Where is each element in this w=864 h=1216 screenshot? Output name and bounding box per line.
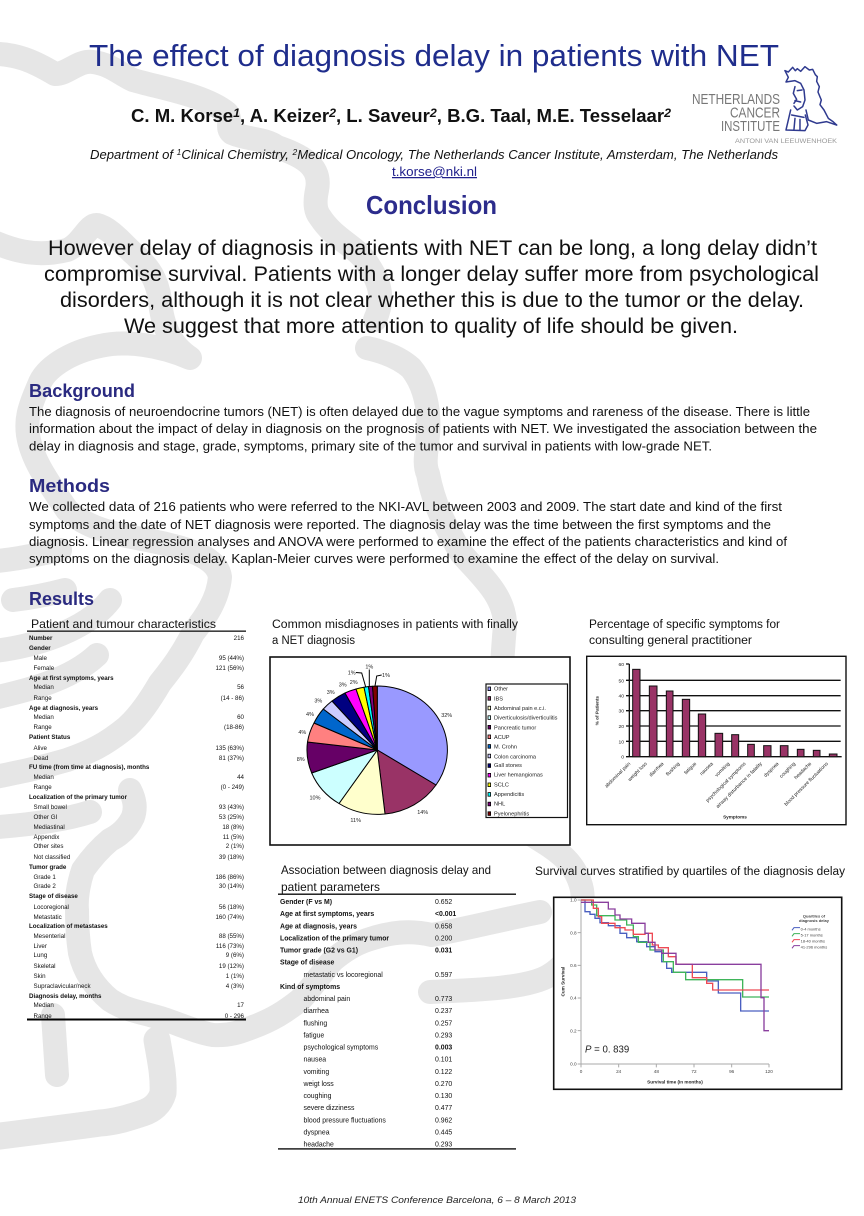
conclusion text: We suggest that more attention to quality of life should be given. (124, 315, 738, 338)
table rows: 0.658 (435, 923, 452, 930)
pie labels: 2% (350, 680, 358, 686)
heading: methods: Methods (29, 476, 110, 496)
methods text: diagnosis. Linear regression analyses and ANOVA were performed to examine the effect of the patients characteristics and kind of (29, 535, 788, 549)
axis labels: 1.0 (570, 898, 577, 903)
table rows: 18 (8%) (222, 824, 244, 831)
table rows: diarrhea (304, 1008, 329, 1015)
methods text: symptoms and the date of NET diagnosis were reported. The diagnosis delay was the time between the first symptoms and the (29, 518, 771, 532)
table rows: 56 (18%) (219, 904, 244, 911)
pie labels: 10% (309, 796, 321, 802)
panel: common misdiagnoses pie chart (270, 619, 570, 845)
pie legend: M. Crohn (494, 745, 517, 751)
table rows: fatigue (304, 1032, 324, 1039)
chart heading: consulting general practitioner (589, 635, 752, 647)
axis labels: 0.0 (570, 1062, 577, 1067)
table rows: weigt loss (302, 1081, 334, 1088)
pie labels: 11% (350, 818, 361, 824)
pie labels: 1% (348, 670, 356, 676)
conclusion text: disorders, although it is not clear whether this is due to the tumor or the delay. (60, 289, 804, 312)
table rows: Stage of disease (29, 893, 78, 900)
pie legend: Pancreatic tumor (494, 725, 536, 731)
x axis labels: psychological symptoms (705, 761, 748, 804)
table rows: 0.122 (435, 1069, 452, 1076)
table rows: Liver (34, 943, 47, 950)
footer: 10th Annual ENETS Conference Barcelona, 6 – 8 March 2013 (298, 1195, 577, 1206)
legend: 41-296 months (801, 944, 827, 949)
background text: delay in diagnosis and stage, grade, symptoms, primary site of the tumor and survival in patients with low-grade NET. (29, 440, 712, 454)
table rows: Diagnosis delay, months (29, 993, 102, 1000)
authors: , A. Keizer (240, 106, 329, 126)
legend: diagnosis delay (799, 918, 830, 923)
table rows: 93 (43%) (219, 804, 244, 811)
table rows: 0.962 (435, 1117, 452, 1124)
authors: , L. Saveur (336, 106, 430, 126)
pie labels: 3% (339, 683, 347, 689)
chart heading (272, 619, 518, 647)
y axis labels: 50 (618, 678, 624, 684)
table rows: 0.101 (435, 1057, 452, 1064)
table rows: Age at diagnosis, years (280, 923, 357, 930)
table rows: 2 (1%) (226, 843, 244, 850)
background text: information about the impact of delay in diagnosis on the prognosis of patients with NET. We investigated the association between the (29, 422, 817, 436)
table rows: headache (304, 1142, 334, 1149)
table rows: vomiting (304, 1069, 329, 1076)
y axis labels (618, 662, 624, 761)
table rows: 160 (74%) (215, 914, 244, 921)
axis labels: 0.8 (570, 930, 577, 935)
table rows: severe dizziness (304, 1105, 355, 1112)
table rows: 19 (12%) (219, 963, 244, 970)
y axis labels: 0 (621, 755, 624, 761)
curve: 0-4 months (581, 900, 769, 1011)
table rows: Localization of the primary tumor (280, 935, 389, 942)
table rows: Tumor grade (29, 864, 67, 871)
table rows: 116 (73%) (216, 943, 244, 950)
table rows: 0.652 (435, 899, 452, 906)
table rows: Age at first symptoms, years (29, 675, 114, 682)
table rows: 0.031 (435, 948, 452, 954)
authors: 2 (328, 106, 336, 120)
pie legend: NHL (494, 802, 505, 808)
p value: P = 0. 839 (585, 1044, 629, 1055)
authors: , B.G. Taal, M.E. Tesselaar (437, 106, 664, 126)
y axis labels: 30 (618, 709, 624, 715)
affiliations: Department of (90, 148, 169, 162)
table rows: Mediastinal (34, 824, 65, 831)
table rows: Mesenterial (34, 933, 65, 940)
panel: association table (278, 863, 516, 1150)
pie legend: Diverticulosis/diverticulitis (494, 716, 558, 722)
authors: C. M. Korse (131, 106, 230, 126)
axes (578, 900, 769, 1067)
axis labels: 0.2 (570, 1028, 577, 1033)
conclusion text: However delay of diagnosis in patients with NET can be long, a long delay didn’t (48, 237, 817, 260)
table rows: Female (34, 665, 55, 672)
y axis labels: 10 (618, 739, 624, 745)
table rows: Other sites (34, 843, 63, 850)
panel: symptoms bar chart (587, 619, 846, 825)
x axis labels: flushing (665, 761, 682, 778)
affiliations: 2 (292, 148, 298, 157)
chart heading: Survival curves stratified by quartiles of the diagnosis delay (535, 866, 845, 878)
table rows: 0.257 (435, 1020, 452, 1027)
x axis labels: fatigue (683, 761, 698, 776)
axis labels (561, 898, 773, 1084)
pie legend: ACUP (494, 735, 510, 741)
table rows: 0.477 (435, 1105, 452, 1112)
chart heading: a NET diagnosis (272, 635, 355, 647)
table rows: psychological symptoms (304, 1045, 379, 1052)
table rows: 88 (55%) (219, 933, 244, 940)
heading: conclusion: Conclusion (366, 190, 497, 220)
table rows: Gender (F vs M) (280, 899, 332, 906)
contact email: t.korse@nki.nl (392, 165, 477, 179)
axis labels: 120 (765, 1069, 773, 1074)
y axis labels: 40 (618, 694, 624, 700)
pie labels: 14% (417, 810, 428, 816)
table rows: Tumor grade (G2 vs G1) (280, 948, 358, 954)
axis titles: Symptoms (723, 814, 747, 819)
table rows: Range (34, 724, 52, 731)
logo: Netherlands Cancer Institute: INSTITUTE (721, 118, 780, 135)
table rows: 95 (44%) (219, 655, 244, 662)
conclusion text: compromise survival. Patients with a longer delay suffer more from psychological (44, 263, 819, 286)
axis labels: Survival time (in months) (647, 1079, 703, 1084)
table rows: 186 (86%) (215, 874, 244, 881)
pie legend: Other (494, 687, 508, 693)
table rows: dyspnea (304, 1130, 330, 1136)
table heading: Association between diagnosis delay and (281, 863, 491, 877)
table rows: nausea (304, 1057, 326, 1064)
axis labels: 0.4 (570, 996, 577, 1001)
table rows: Range (34, 1013, 52, 1020)
axis labels: 72 (691, 1069, 697, 1074)
curve: 5-17 months (581, 900, 769, 997)
pie legend: Colon carcinoma (494, 754, 537, 760)
panel: survival curves (535, 866, 845, 1089)
pie labels: 32% (441, 713, 452, 719)
panel: patient and tumour characteristics table (27, 617, 246, 1020)
logo: Netherlands Cancer Institute: ANTONI VAN LEEUWENHOEK (735, 139, 837, 145)
axis labels: 0 (580, 1069, 583, 1074)
pie labels (297, 665, 452, 824)
table rows: Range (34, 695, 52, 702)
legend: Quartiles of (803, 913, 826, 918)
table rows: 0.200 (435, 935, 452, 942)
affiliations: Clinical Chemistry, (181, 148, 293, 162)
table rows: 0.237 (435, 1008, 452, 1015)
table rows: Lung (34, 952, 48, 959)
table rows: Kind of symptoms (280, 984, 340, 991)
table rows: 0.293 (435, 1142, 452, 1149)
pie legend (486, 684, 568, 818)
curve: 41-296 months (581, 902, 769, 1031)
methods text: symptoms on the diagnosis delay. Kaplan-Meier curves were performed to examine the effect of the delay on survival. (29, 552, 719, 566)
y axis labels: 20 (618, 724, 624, 730)
pie legend: Liver hemangiomas (494, 773, 543, 779)
x axis labels (604, 761, 830, 810)
table rows: metastatic vs locoregional (304, 972, 383, 979)
table heading: Patient and tumour characteristics (31, 617, 216, 631)
axis labels: 48 (654, 1069, 659, 1074)
table rows: Age at first symptoms, years (280, 911, 374, 918)
table rows: 4 (3%) (226, 983, 244, 990)
x axis labels: abdominal pain (604, 761, 632, 789)
table rows: 121 (56%) (215, 665, 244, 672)
authors: 1 (233, 106, 240, 120)
x axis labels: nausea (699, 761, 715, 777)
conclusion text (44, 237, 819, 338)
x axis labels: diarrhea (648, 761, 666, 778)
authors: 2 (429, 106, 437, 120)
table rows: FU time (from time at diagnosis), months (29, 764, 150, 771)
table rows: Stage of disease (280, 960, 335, 967)
table rows (29, 635, 245, 1020)
x axis labels: blood pressure fluctuations (783, 761, 830, 808)
table rows: 30 (14%) (219, 883, 244, 890)
table rows: abdominal pain (304, 996, 350, 1003)
table rows: 1 (1%) (226, 973, 244, 980)
table rows: Range (34, 784, 52, 791)
table rows: Localization of the primary tumor (29, 794, 128, 801)
table rows: <0.001 (435, 911, 456, 918)
table heading: patient parameters (281, 880, 380, 894)
logo: Netherlands Cancer Institute: CANCER (730, 104, 780, 122)
table rows: Small bowel (34, 804, 67, 811)
pie labels: 4% (306, 712, 314, 718)
table heading (281, 863, 491, 894)
table rows: Median (34, 774, 54, 781)
table rows: (14 - 86) (221, 695, 244, 702)
legend: 18-40 months (801, 938, 825, 943)
pie legend: Pyelonephritis (494, 811, 529, 817)
y axis labels: 60 (618, 662, 624, 668)
table rows: Skeletal (34, 963, 56, 970)
pie labels: 3% (327, 690, 335, 696)
chart heading (589, 619, 780, 647)
affiliations: Medical Oncology, The Netherlands Cancer Institute, Amsterdam, The Netherlands (297, 148, 778, 162)
table rows: blood pressure fluctuations (304, 1117, 386, 1124)
table rows: 0.773 (435, 996, 452, 1003)
legend (792, 913, 830, 949)
methods text (29, 500, 788, 566)
chart heading: Percentage of specific symptoms for (589, 619, 780, 631)
table rows: Number (29, 635, 53, 642)
table rows: 11 (5%) (223, 834, 244, 841)
table rows: 0.003 (435, 1045, 452, 1052)
methods text: We collected data of 216 patients who were referred to the NKI-AVL between 2003 and 2009. The start date and kind of the first (29, 500, 783, 514)
table rows: Appendix (34, 834, 60, 841)
axis labels: 96 (729, 1069, 735, 1074)
x axis labels: headache (793, 761, 813, 781)
title: The effect of diagnosis delay in patients with NET (89, 38, 779, 73)
panel: symptoms bar chart: % of Patients (595, 696, 600, 725)
background text: The diagnosis of neuroendocrine tumors (NET) is often delayed due to the vague symptoms and rareness of the disease. There is little (29, 405, 810, 419)
table rows: 56 (237, 684, 245, 691)
pie legend: SCLC (494, 782, 509, 788)
table rows (280, 899, 456, 1149)
table rows: Locoregional (34, 904, 69, 911)
grid and axes (629, 680, 841, 741)
table rows: Grade 1 (34, 874, 56, 881)
pie labels: 1% (382, 673, 390, 679)
table rows: Metastatic (34, 914, 62, 921)
affiliations: 1 (177, 148, 181, 157)
table rows: Gender (29, 645, 51, 652)
table rows: Not classified (34, 854, 71, 861)
table rows: 0.130 (435, 1093, 452, 1100)
heading: results: Results (29, 589, 94, 609)
x axis labels: dyspnea (763, 761, 781, 779)
x axis labels: coughing (779, 761, 797, 780)
bars (633, 669, 837, 757)
pie labels: 3% (314, 698, 322, 704)
background text (29, 405, 817, 454)
x axis labels: airway disturbance in fatality (715, 761, 764, 810)
table rows: Median (34, 714, 54, 721)
table rows: 60 (237, 714, 245, 721)
table rows: (18-86) (224, 724, 244, 731)
table rows: 81 (37%) (219, 755, 244, 762)
table rows: 0 - 296 (225, 1013, 245, 1020)
table rows: 17 (237, 1002, 245, 1009)
legend: 5-17 months (801, 932, 823, 937)
logo: Netherlands Cancer Institute: NETHERLANDS (692, 91, 780, 108)
table rows: coughing (304, 1093, 332, 1100)
table rows: Skin (34, 973, 46, 980)
table rows: Patient Status (29, 734, 71, 741)
table rows: 39 (18%) (219, 854, 244, 861)
table rows: 0.445 (435, 1130, 452, 1136)
pie legend: Abdominal pain e.c.i. (494, 706, 546, 712)
table rows: Age at diagnosis, years (29, 705, 99, 712)
table rows: Grade 2 (34, 883, 56, 890)
legend: 0-4 months (801, 926, 821, 931)
logo: Netherlands Cancer Institute (692, 67, 837, 145)
table rows: (0 - 249) (221, 784, 244, 791)
pie labels: 8% (297, 757, 305, 763)
table rows: 9 (6%) (226, 952, 244, 959)
table rows: Dead (34, 755, 49, 762)
table rows: Other GI (34, 814, 58, 821)
pie legend: Appendicitis (494, 792, 524, 798)
table rows: Median (34, 1002, 54, 1009)
table rows: Supraclavicular/neck (34, 983, 91, 990)
axis labels: 24 (616, 1069, 622, 1074)
chart heading: Common misdiagnoses in patients with finally (272, 619, 518, 631)
table rows: 0.270 (435, 1081, 452, 1088)
pie legend: Gall stones (494, 763, 522, 769)
x axis labels: vomiting (714, 761, 732, 779)
pie labels: 1% (365, 665, 373, 671)
pie labels: 4% (298, 730, 306, 736)
table rows: Male (34, 655, 47, 662)
axis labels: 0.6 (570, 963, 577, 968)
table rows: flushing (304, 1020, 327, 1027)
table rows: 216 (234, 635, 245, 642)
table rows: Localization of metastases (29, 923, 108, 930)
authors: 2 (663, 106, 671, 120)
table rows: Alive (34, 745, 47, 752)
axis labels: Cum Survival (561, 967, 566, 997)
table rows: 135 (63%) (215, 745, 244, 752)
pie legend: IBS (494, 696, 503, 702)
pie slices (307, 686, 447, 814)
table rows: 53 (25%) (219, 814, 244, 821)
heading: background: Background (29, 381, 135, 401)
curve: 18-40 months (581, 900, 769, 990)
x axis labels: weight loss (627, 761, 649, 783)
table rows: 0.293 (435, 1032, 452, 1039)
table rows: Median (34, 684, 54, 691)
table rows: 44 (237, 774, 245, 781)
table rows: 0.597 (435, 972, 452, 979)
